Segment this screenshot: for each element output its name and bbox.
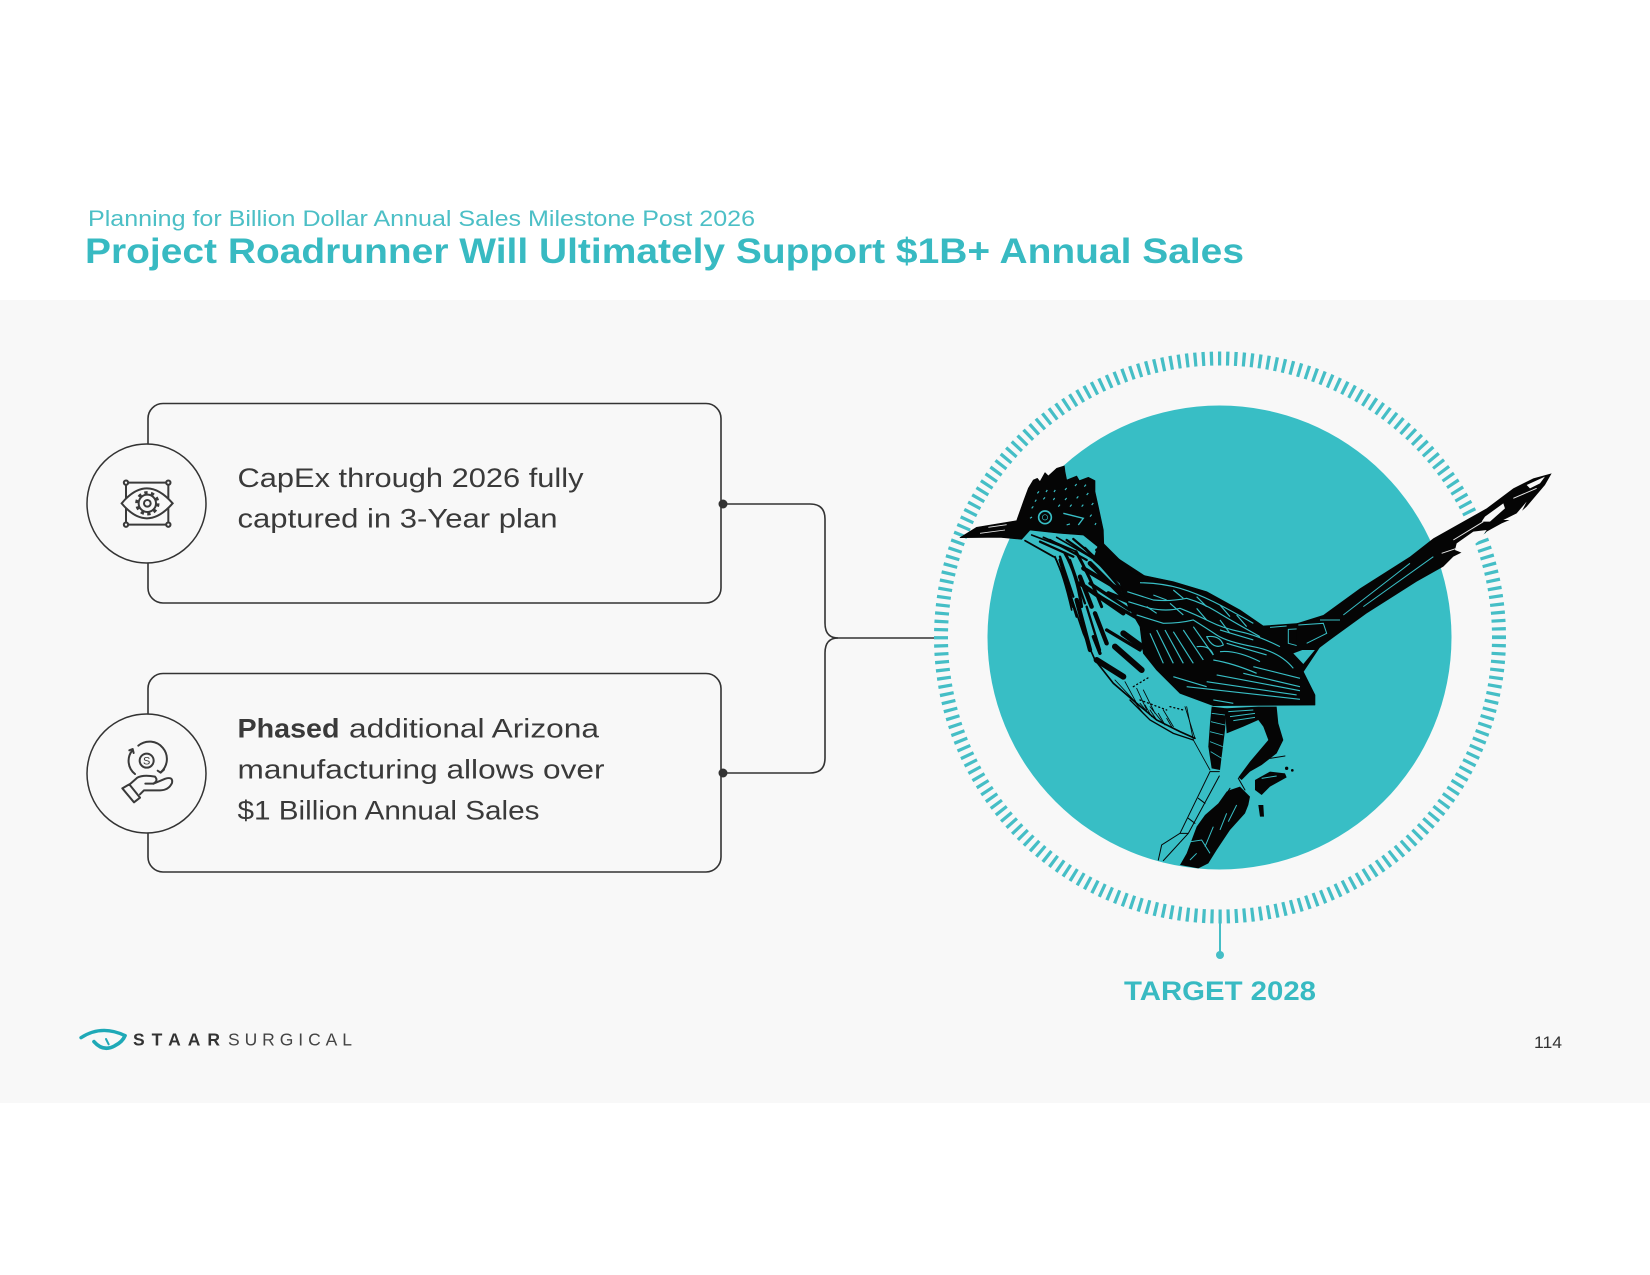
card text: manufacturing allows over	[238, 754, 605, 784]
icon: eye with gear	[87, 444, 206, 563]
page number: 114	[1534, 1034, 1562, 1052]
pointer line	[1216, 912, 1224, 959]
card text: CapEx through 2026 fully	[238, 463, 584, 493]
subtitle: Planning for Billion Dollar Annual Sales Milestone Post 2026	[88, 206, 755, 231]
icon: hand with dollar coin	[87, 714, 206, 833]
panel: phased manufacturing card	[87, 674, 721, 872]
bird neck, body, wing	[1040, 539, 1340, 738]
panel: capex card	[87, 404, 721, 603]
card text	[238, 463, 584, 534]
logo eye	[81, 1030, 125, 1048]
logo	[81, 1030, 352, 1050]
connector lines	[718, 500, 934, 778]
icon: hand with dollar coin: S	[143, 756, 150, 768]
card text: captured in 3-Year plan	[238, 504, 558, 534]
bird tail	[1297, 473, 1552, 650]
card text: Phased	[238, 714, 340, 744]
logo: SURGICAL	[228, 1030, 352, 1050]
bird head	[960, 466, 1150, 610]
card text	[238, 714, 605, 826]
throat and upper neck streaks	[1025, 535, 1150, 610]
title: Project Roadrunner Will Ultimately Support $1B+ Annual Sales	[85, 231, 1244, 271]
card text: additional Arizona	[349, 714, 600, 744]
target label: TARGET 2028	[1124, 976, 1316, 1006]
illustration: roadrunner	[960, 466, 1552, 868]
bird legs and branch	[1130, 700, 1294, 868]
tick ring	[941, 358, 1499, 916]
card text: $1 Billion Annual Sales	[238, 796, 540, 826]
logo wordmark: STAAR	[133, 1030, 220, 1050]
teal circle	[988, 406, 1452, 870]
panel: grey background	[0, 300, 1650, 1103]
